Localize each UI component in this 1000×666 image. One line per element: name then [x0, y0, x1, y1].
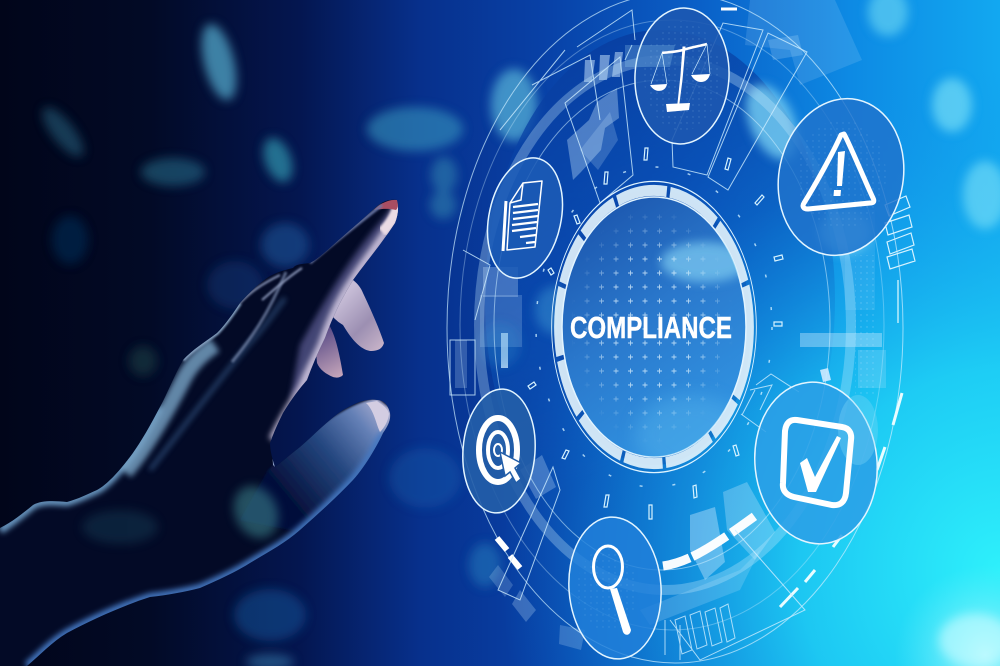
small ticks — [528, 148, 783, 519]
translucent tech panels — [455, 0, 886, 650]
palm lower rim light — [27, 433, 383, 666]
middle finger — [333, 280, 384, 351]
icon: warning triangle — [764, 87, 918, 267]
ring finger — [316, 323, 343, 378]
icon: document — [477, 151, 573, 285]
outlined wedge panels — [450, 10, 807, 660]
ring outlines and arcs — [447, 0, 903, 663]
nail — [374, 200, 398, 210]
ring around central disc — [552, 181, 756, 473]
hand pointing at the interface — [0, 190, 410, 666]
wrist and knuckle ridge light — [0, 407, 160, 530]
dark band behind rings — [485, 30, 835, 570]
central disc — [560, 197, 750, 475]
thumb — [240, 398, 395, 532]
brick glyphs right — [885, 196, 915, 269]
title: COMPLIANCE: COMPLIANCE — [570, 310, 732, 345]
icon: scales of justice — [625, 6, 732, 146]
icon: target with cursor — [459, 387, 539, 515]
circular interface — [447, 0, 915, 663]
icon: magnifying glass — [564, 514, 666, 662]
icon: check box — [747, 376, 885, 550]
soft interface glows — [480, 77, 871, 367]
index finger light — [290, 200, 400, 400]
